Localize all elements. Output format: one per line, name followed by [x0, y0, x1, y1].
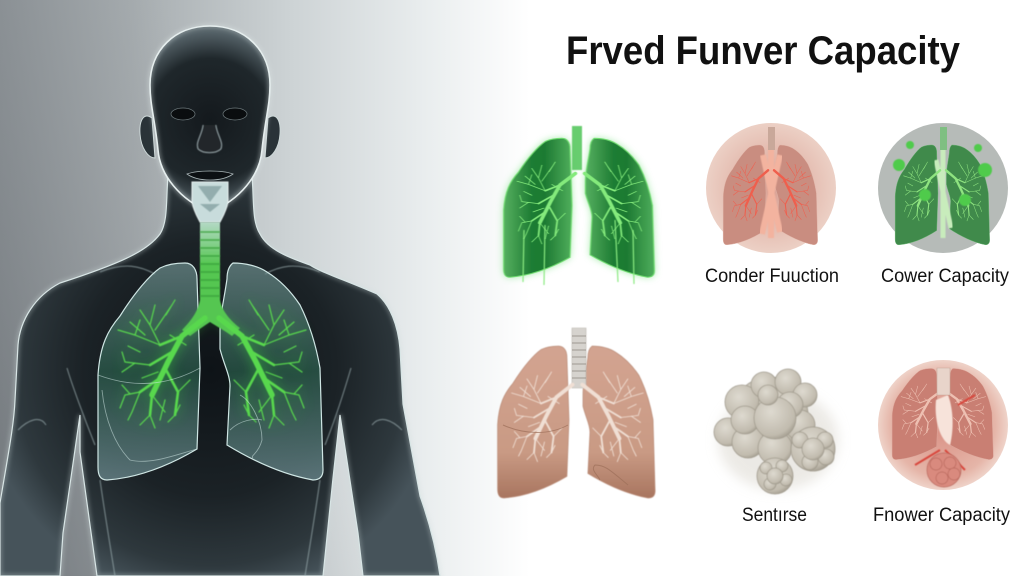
head rim light	[150, 26, 270, 212]
bronchial tree	[118, 300, 306, 428]
eye right	[223, 108, 247, 120]
disc	[878, 123, 1008, 253]
label: sentirse: Sentırse	[742, 505, 807, 526]
trachea rings	[200, 232, 220, 296]
lobes	[723, 145, 818, 245]
tree	[901, 384, 986, 438]
ear right	[265, 116, 280, 158]
lobes	[498, 346, 655, 498]
trachea	[937, 368, 950, 395]
medium cluster	[791, 427, 835, 471]
lobe folds	[503, 425, 628, 485]
human figure	[0, 26, 440, 576]
title: Frved Funver Capacity	[566, 29, 961, 73]
lobes	[892, 368, 993, 460]
pale center	[936, 395, 953, 445]
lung lobes	[98, 263, 323, 480]
green glow halo	[504, 138, 654, 277]
trachea	[572, 328, 586, 388]
body silhouette	[0, 175, 440, 576]
green vertical lines	[523, 220, 634, 285]
chest lines	[18, 266, 402, 576]
red accent	[915, 395, 975, 470]
cell cluster	[714, 369, 838, 494]
label: fnower capacity: Fnower Capacity	[873, 505, 1010, 526]
disc	[878, 360, 1008, 490]
body rim light	[0, 175, 440, 576]
tree	[904, 162, 983, 221]
ear left	[140, 116, 155, 158]
red tree	[732, 162, 811, 221]
label: cower capacity: Cower Capacity	[881, 266, 1009, 287]
lung fold lines	[98, 368, 262, 461]
pale tree	[512, 372, 643, 462]
green tree	[517, 162, 643, 244]
large cluster	[714, 369, 817, 465]
head	[150, 26, 270, 212]
eye left	[171, 108, 195, 120]
nodules	[893, 141, 992, 206]
green lungs circle	[878, 123, 1008, 253]
brown lungs	[498, 328, 655, 498]
green glow	[118, 300, 306, 428]
mouth	[187, 171, 233, 180]
throat	[192, 182, 228, 222]
green lobes	[504, 138, 654, 277]
red lungs circle	[706, 123, 836, 253]
soft shadow	[718, 390, 838, 490]
pale center	[936, 145, 951, 238]
lobes	[895, 145, 990, 245]
trachea	[768, 127, 775, 150]
small cluster	[757, 458, 793, 494]
red lungs with mass circle	[878, 360, 1008, 490]
disc	[706, 123, 836, 253]
green lungs	[504, 126, 654, 285]
throat detail	[198, 186, 222, 212]
green trachea	[572, 126, 582, 170]
trachea rings	[572, 336, 586, 378]
mass	[927, 453, 961, 487]
nose	[197, 125, 222, 153]
main lungs	[98, 222, 323, 480]
trachea	[182, 222, 240, 336]
label: conder function: Conder Fuuction	[705, 266, 839, 287]
trachea	[940, 127, 947, 150]
central pale branches	[762, 145, 780, 238]
